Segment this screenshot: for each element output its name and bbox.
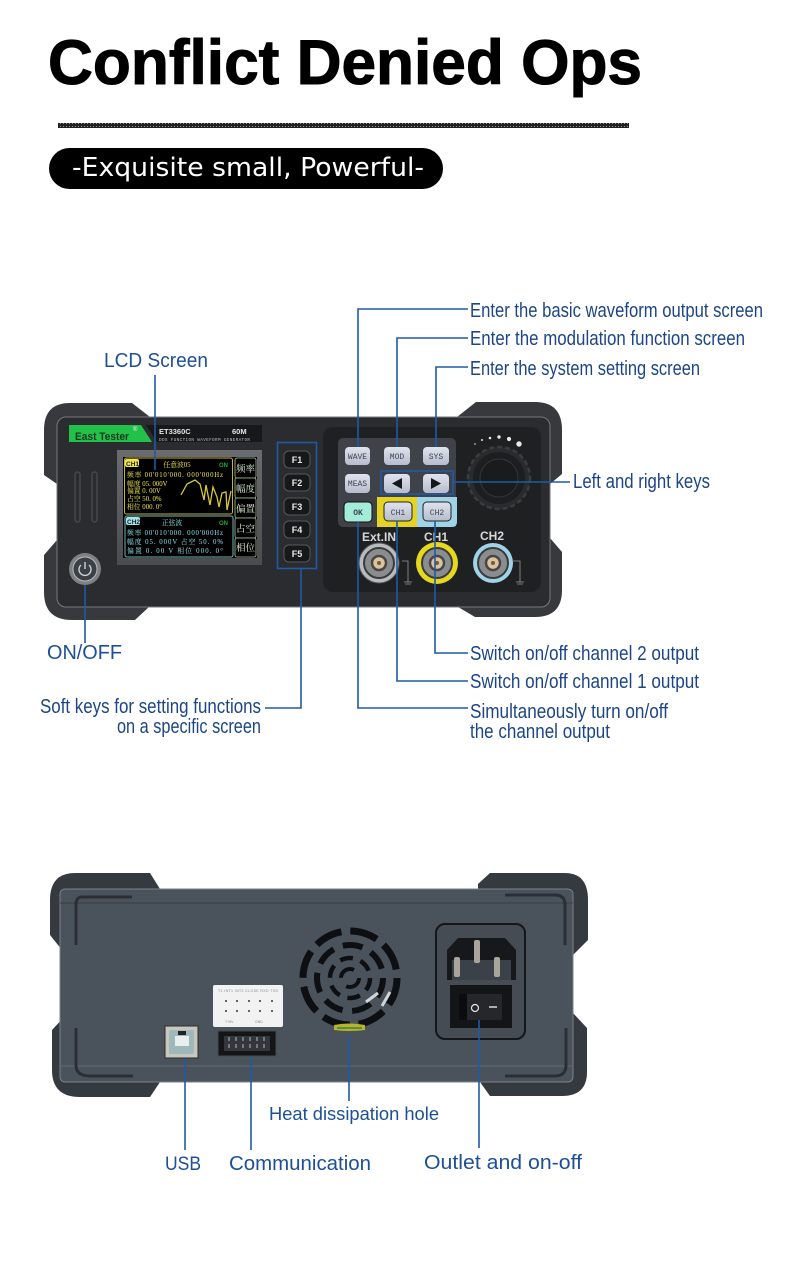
BNC connectors: [359, 529, 524, 584]
model plate: DDS FUNCTION WAVEFORM GENERATOR: [159, 438, 250, 443]
LCD screen: [117, 450, 262, 565]
LCD screen: CH2: [127, 519, 140, 526]
LCD screen: ON: [219, 463, 228, 469]
LCD screen: ON: [219, 521, 228, 527]
label: heat dissipation: Heat dissipation hole: [269, 1103, 439, 1124]
speaker slots: [75, 472, 97, 522]
label: channel 2 switch: Switch on/off channel 2 output: [470, 643, 699, 665]
F keys: [284, 451, 310, 562]
title: Conflict Denied Ops: [48, 28, 642, 98]
LCD screen: 幅度: [236, 481, 255, 495]
USB port: [165, 1026, 198, 1058]
brand badge: East Tester: [75, 431, 130, 443]
key block: CH2: [430, 509, 444, 518]
rear callout lines: [185, 1020, 479, 1150]
LCD screen: 正弦波: [162, 518, 182, 527]
white pin label: GND: [255, 1020, 263, 1024]
corner brackets: [76, 895, 566, 1076]
waveform: [181, 480, 231, 510]
LCD screen: 频率 00'010'000. 000'000Hz: [127, 470, 223, 479]
brand badge: [69, 425, 152, 443]
F keys: F1: [292, 455, 302, 465]
white pin label: [213, 985, 283, 1027]
label: soft keys: Soft keys for setting functions: [40, 696, 261, 718]
communication connector: [218, 1031, 276, 1056]
ON/OFF label: ON/OFF: [47, 642, 122, 664]
BNC connectors: CH2: [480, 529, 504, 543]
front body: [57, 417, 550, 607]
label: soft keys: on a specific screen: [117, 716, 261, 738]
LCD Screen label: LCD Screen: [104, 350, 208, 372]
key block: MEAS: [348, 480, 367, 489]
LCD screen: 占空: [236, 521, 255, 535]
BNC connectors: CH1: [424, 530, 448, 544]
label: simultaneous output: Simultaneously turn on/off: [470, 701, 668, 723]
LCD screen: 频率 00'010'000. 000'000Hz: [127, 528, 223, 537]
front bumpers: [44, 402, 562, 620]
label: outlet: Outlet and on-off: [424, 1151, 582, 1174]
F keys: F3: [292, 502, 302, 512]
key block: WAVE: [348, 453, 367, 462]
label: USB: USB: [165, 1154, 201, 1175]
model plate: [146, 425, 262, 443]
label: communication: Communication: [229, 1153, 371, 1175]
white pin label: T+5V: [225, 1020, 234, 1024]
key block: OK: [353, 509, 363, 518]
front callout lines: [85, 309, 570, 708]
BNC connectors: Ext.IN: [362, 530, 396, 544]
LCD screen: 偏置 0. 00V: [127, 486, 161, 495]
model plate: 60M: [232, 427, 247, 436]
LCD screen: 相位 000. 0°: [127, 502, 162, 511]
power inlet module: [436, 924, 525, 1039]
screen soft tabs: [235, 458, 256, 557]
rear body: [60, 889, 573, 1082]
LCD screen: 占空 50. 0%: [127, 494, 162, 503]
label: arrow keys: Left and right keys: [573, 471, 710, 493]
fan grille: [303, 931, 397, 1031]
LCD screen: 相位: [236, 540, 255, 554]
label: simultaneous output: [470, 701, 668, 743]
label: simultaneous output: the channel output: [470, 721, 610, 743]
LCD screen: 偏置 0. 00 V 相位 000. 0°: [127, 546, 223, 555]
rear panel device: [50, 873, 588, 1097]
rear bumpers: [50, 873, 588, 1097]
LCD screen: 任意波05: [163, 460, 191, 469]
right control panel: [323, 427, 541, 592]
brand badge: ®: [133, 426, 138, 433]
LCD screen: CH1: [126, 461, 139, 468]
LCD screen: 幅度 05. 000V 占空 50. 0%: [127, 537, 223, 546]
model plate: ET3360C: [159, 427, 191, 436]
white pin label: T1 INT1 INT2 CLOSE RXD TXD: [218, 989, 278, 993]
F keys: F5: [292, 549, 302, 559]
rotary knob: [468, 435, 530, 509]
LCD screen: 幅度 05. 000V: [127, 479, 168, 488]
LCD screen: 频率: [236, 461, 255, 475]
label: soft keys: [40, 696, 261, 738]
power button: [69, 553, 101, 585]
key block: [338, 438, 457, 527]
key block: CH1: [391, 509, 405, 518]
subtitle pill: -Exquisite small, Powerful-: [72, 153, 424, 183]
label: system setting: Enter the system setting screen: [470, 358, 700, 380]
F keys: F4: [292, 525, 302, 535]
front panel device: [44, 402, 562, 620]
key block: SYS: [429, 453, 443, 462]
label: modulation screen: Enter the modulation function screen: [470, 328, 745, 350]
LCD screen: 偏置: [236, 501, 255, 515]
F keys: F2: [292, 478, 302, 488]
key block: MOD: [390, 453, 404, 462]
subtitle pill: [49, 148, 443, 189]
label: channel 1 switch: Switch on/off channel 1 output: [470, 671, 699, 693]
title rule: [58, 123, 629, 128]
